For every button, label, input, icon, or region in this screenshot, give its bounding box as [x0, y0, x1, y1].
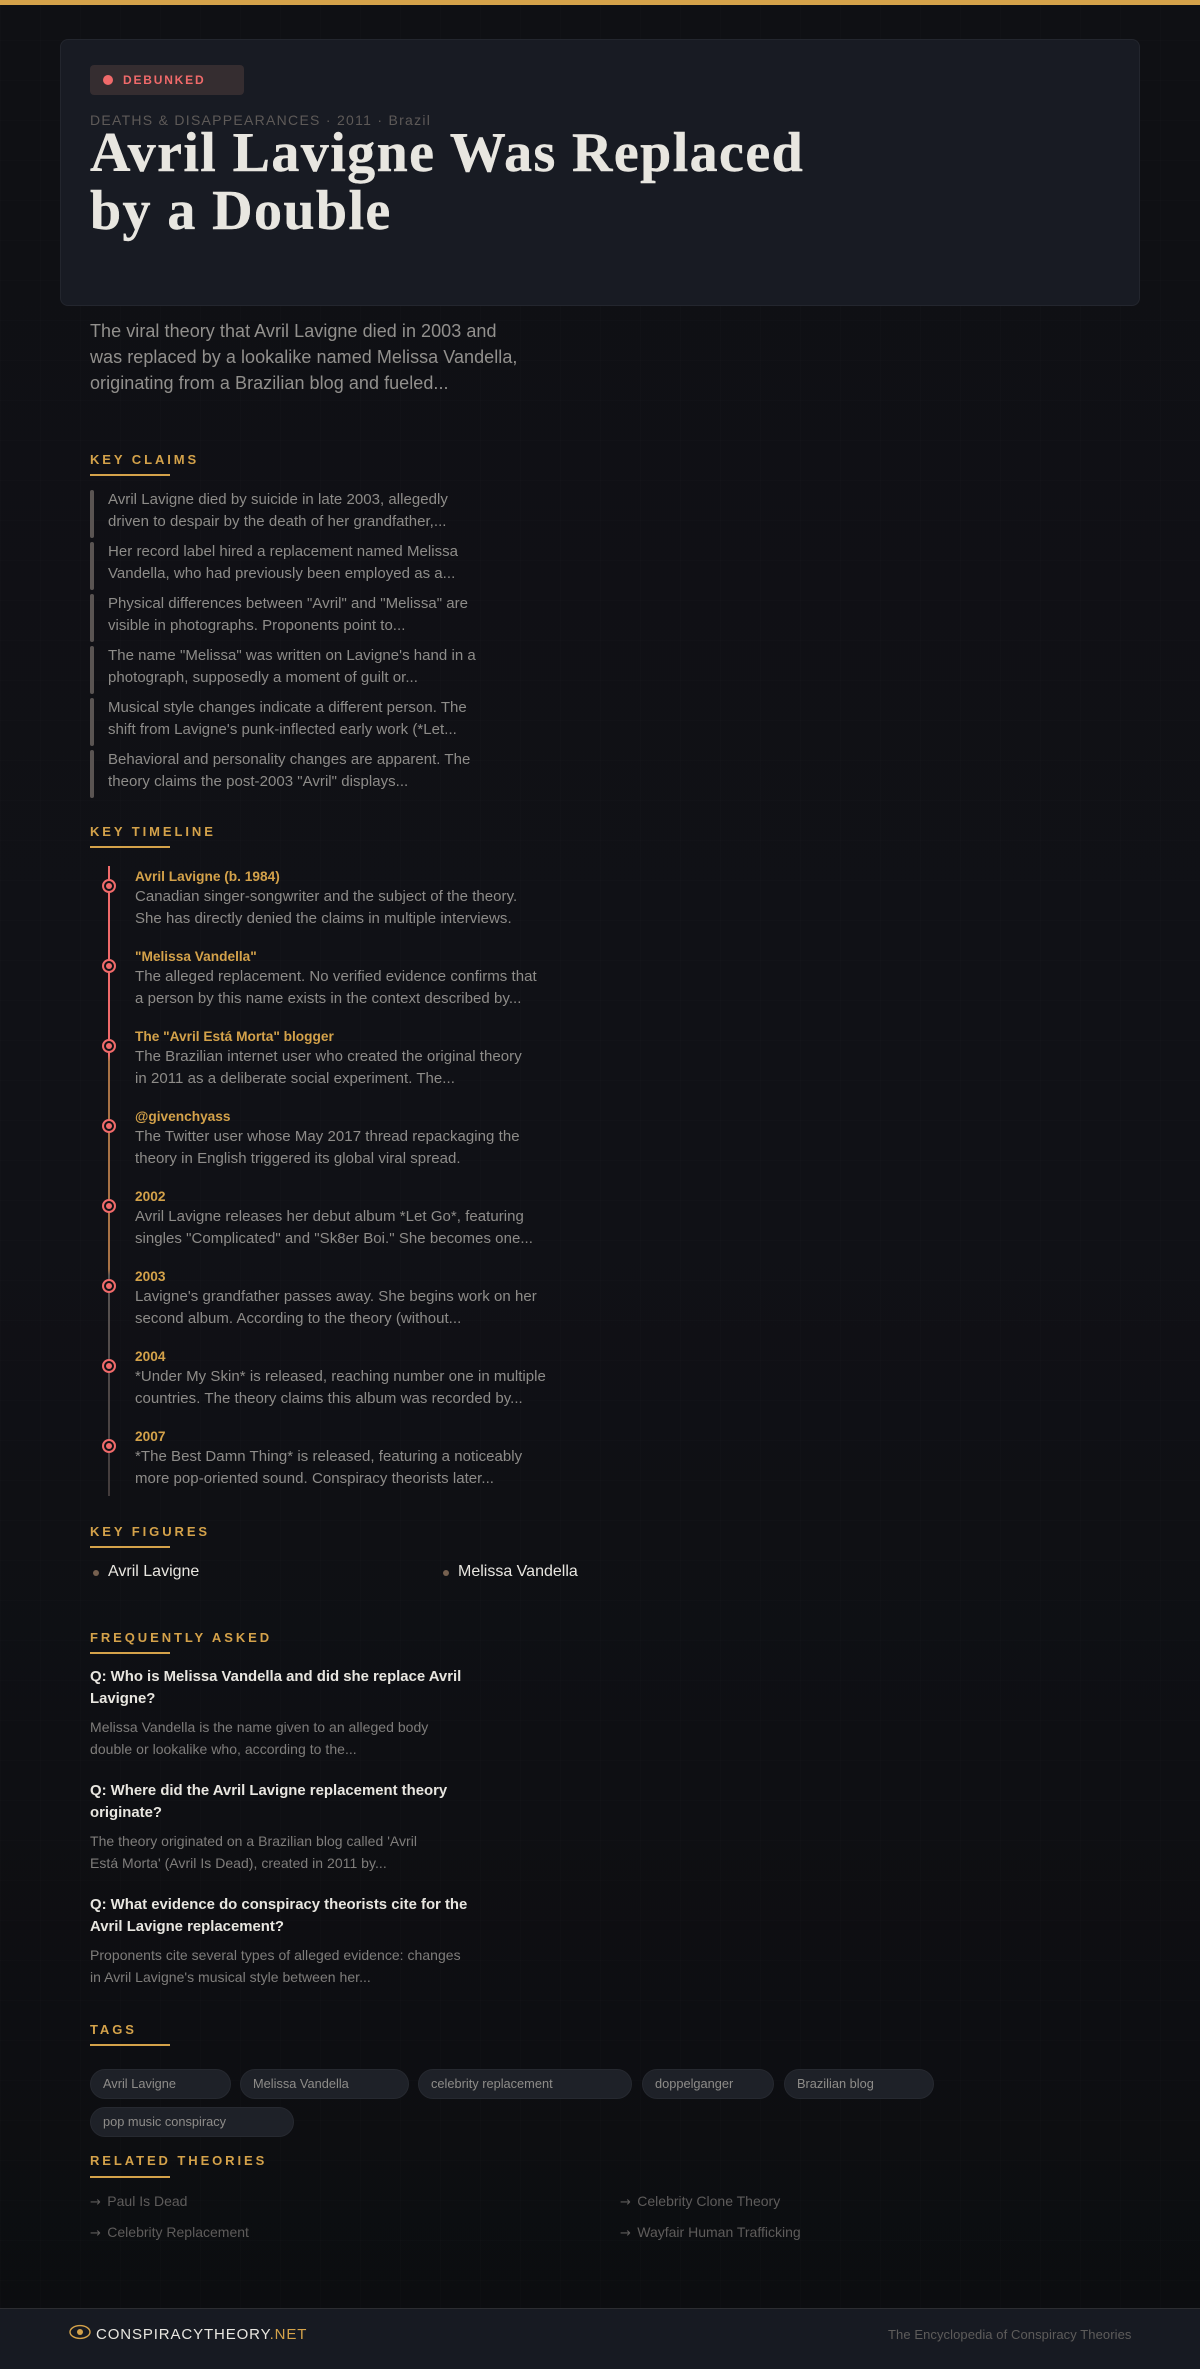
description: was replaced by a lookalike named Melissa Vandella, — [90, 347, 517, 367]
related link: → — [620, 2226, 631, 2241]
heading: related theories: RELATED THEORIES — [90, 2153, 267, 2168]
heading: key claims: KEY CLAIMS — [90, 452, 199, 467]
faq item 1: Lavigne? — [90, 1691, 155, 1707]
panel: frequently asked — [90, 1630, 467, 1985]
faq item 1 — [90, 1669, 461, 1757]
related link: Paul Is Dead — [107, 2193, 187, 2209]
claim 1: driven to despair by the death of her grandfather,... — [108, 513, 446, 530]
timeline event: 2002: singles "Complicated" and "Sk8er Boi." She becomes one... — [135, 1230, 533, 1247]
heading: key figures: KEY FIGURES — [90, 1524, 210, 1539]
footer logo text: CONSPIRACYTHEORY.NET — [96, 2326, 307, 2343]
claim 4: photograph, supposedly a moment of guilt or... — [108, 669, 418, 686]
tag — [784, 2069, 934, 2099]
timeline event: 2002: 2002 — [135, 1189, 165, 1204]
timeline event: 2004: countries. The theory claims this album was recorded by... — [135, 1390, 523, 1407]
timeline event: Avril Lavigne — [102, 869, 517, 927]
timeline event: 2003 — [102, 1269, 537, 1327]
tag — [240, 2069, 409, 2099]
timeline event: 2004 — [102, 1349, 546, 1407]
heading: tags: TAGS — [90, 2022, 137, 2037]
tag: Brazilian blog — [797, 2076, 874, 2091]
claim 6: Behavioral and personality changes are apparent. The — [108, 751, 470, 768]
claim 5: shift from Lavigne's punk-inflected early work (*Let... — [108, 721, 457, 738]
timeline event: 2004: 2004 — [135, 1349, 165, 1364]
tag: pop music conspiracy — [103, 2114, 226, 2129]
tag: celebrity replacement — [431, 2076, 553, 2091]
footer tagline: The Encyclopedia of Conspiracy Theories — [888, 2327, 1132, 2342]
timeline event: Avril Lavigne: Canadian singer-songwriter and the subject of the theory. — [135, 888, 517, 905]
panel: tags — [90, 2022, 934, 2137]
claim 6: theory claims the post-2003 "Avril" displays... — [108, 773, 408, 790]
title: Avril Lavigne Was Replaced — [90, 122, 804, 184]
heading: frequently asked: FREQUENTLY ASKED — [90, 1630, 272, 1645]
panel: related theories — [90, 2153, 801, 2241]
title — [90, 122, 804, 242]
panel: hero — [60, 39, 1140, 306]
related link: Celebrity Replacement — [107, 2224, 249, 2240]
timeline event: 2003: Lavigne's grandfather passes away. She begins work on her — [135, 1288, 537, 1305]
timeline event: blogger: The "Avril Está Morta" blogger — [135, 1029, 334, 1044]
timeline event: Melissa Vandella: a person by this name exists in the context described by... — [135, 990, 521, 1007]
faq item 1: Melissa Vandella is the name given to an alleged body — [90, 1719, 428, 1735]
timeline event: givenchyass: The Twitter user whose May 2017 thread repackaging the — [135, 1128, 520, 1145]
faq item 3: Q: What evidence do conspiracy theorists cite for the — [90, 1897, 467, 1913]
icon: eye logo — [69, 2324, 91, 2340]
timeline event: Melissa Vandella: The alleged replacement. No verified evidence confirms that — [135, 968, 537, 985]
tag — [90, 2107, 294, 2137]
status badge: debunked — [90, 65, 244, 95]
figure: Melissa Vandella: Melissa Vandella — [458, 1563, 578, 1580]
tag: doppelganger — [655, 2076, 733, 2091]
timeline event: Avril Lavigne: Avril Lavigne (b. 1984) — [135, 869, 280, 884]
timeline event: 2007: *The Best Damn Thing* is released, featuring a noticeably — [135, 1448, 522, 1465]
panel: key figures — [90, 1524, 578, 1580]
faq item 2: Q: Where did the Avril Lavigne replacement theory — [90, 1783, 447, 1799]
timeline event: 2007: 2007 — [135, 1429, 165, 1444]
claim 4 — [90, 646, 476, 694]
description: The viral theory that Avril Lavigne died in 2003 and — [90, 321, 497, 341]
timeline event: blogger: in 2011 as a deliberate social experiment. The... — [135, 1070, 455, 1087]
claim 2 — [90, 542, 458, 590]
timeline line — [108, 866, 110, 1496]
tag — [90, 2069, 231, 2099]
timeline event: 2004: *Under My Skin* is released, reaching number one in multiple — [135, 1368, 546, 1385]
timeline event: givenchyass: theory in English triggered its global viral spread. — [135, 1150, 461, 1167]
timeline event: 2007 — [102, 1429, 522, 1487]
related link: → — [90, 2226, 101, 2241]
faq item 3: Proponents cite several types of alleged evidence: changes — [90, 1947, 461, 1963]
faq item 1: double or lookalike who, according to the... — [90, 1741, 357, 1757]
related link: Wayfair Human Trafficking — [637, 2224, 801, 2240]
related link: → — [90, 2195, 101, 2210]
footer — [0, 2308, 1200, 2369]
tag — [418, 2069, 632, 2099]
description — [90, 321, 517, 393]
panel: key claims — [90, 452, 476, 798]
top accent bar — [0, 0, 1200, 5]
timeline event: givenchyass: @givenchyass — [135, 1109, 231, 1124]
claim 1: Avril Lavigne died by suicide in late 2003, allegedly — [108, 491, 448, 508]
timeline event: 2003: second album. According to the theory (without... — [135, 1310, 461, 1327]
claim 4: The name "Melissa" was written on Lavigne's hand in a — [108, 647, 476, 664]
timeline event: Melissa Vandella: "Melissa Vandella" — [135, 949, 257, 964]
claim 3: Physical differences between "Avril" and "Melissa" are — [108, 595, 468, 612]
faq item 3: Avril Lavigne replacement? — [90, 1919, 284, 1935]
panel: key timeline — [90, 824, 546, 1496]
claim 5 — [90, 698, 467, 746]
claim 5: Musical style changes indicate a different person. The — [108, 699, 467, 716]
tag — [642, 2069, 774, 2099]
heading: key timeline: KEY TIMELINE — [90, 824, 216, 839]
faq item 2: Está Morta' (Avril Is Dead), created in 2011 by... — [90, 1855, 387, 1871]
faq item 3: in Avril Lavigne's musical style between her... — [90, 1969, 371, 1985]
faq item 3 — [90, 1897, 467, 1985]
description: originating from a Brazilian blog and fueled... — [90, 373, 449, 393]
title: by a Double — [90, 180, 392, 242]
timeline event: Avril Lavigne: She has directly denied the claims in multiple interviews. — [135, 910, 512, 927]
timeline event: blogger: The Brazilian internet user who created the original theory — [135, 1048, 522, 1065]
timeline event: Melissa Vandella — [102, 949, 537, 1007]
related link: Celebrity Clone Theory — [637, 2193, 780, 2209]
timeline event: 2007: more pop-oriented sound. Conspiracy theorists later... — [135, 1470, 494, 1487]
claim 1 — [90, 490, 448, 538]
faq item 2: originate? — [90, 1805, 162, 1821]
status badge: debunked: DEBUNKED — [123, 73, 205, 87]
faq item 2 — [90, 1783, 448, 1871]
tag: Melissa Vandella — [253, 2076, 349, 2091]
claim 2: Her record label hired a replacement named Melissa — [108, 543, 458, 560]
timeline event: 2002 — [102, 1189, 533, 1247]
claim 3: visible in photographs. Proponents point to... — [108, 617, 405, 634]
timeline event: givenchyass — [102, 1109, 520, 1167]
figure: Avril Lavigne: Avril Lavigne — [108, 1563, 199, 1580]
claim 2: Vandella, who had previously been employed as a... — [108, 565, 455, 582]
claim 6 — [90, 750, 470, 798]
related link: → — [620, 2195, 631, 2210]
faq item 1: Q: Who is Melissa Vandella and did she replace Avril — [90, 1669, 461, 1685]
timeline event: blogger — [102, 1029, 522, 1087]
claim 3 — [90, 594, 468, 642]
category line: DEATHS & DISAPPEARANCES · 2011 · Brazil — [90, 112, 431, 128]
timeline event: 2002: Avril Lavigne releases her debut album *Let Go*, featuring — [135, 1208, 524, 1225]
timeline event: 2003: 2003 — [135, 1269, 165, 1284]
tag: Avril Lavigne — [103, 2076, 176, 2091]
faq item 2: The theory originated on a Brazilian blog called 'Avril — [90, 1833, 417, 1849]
